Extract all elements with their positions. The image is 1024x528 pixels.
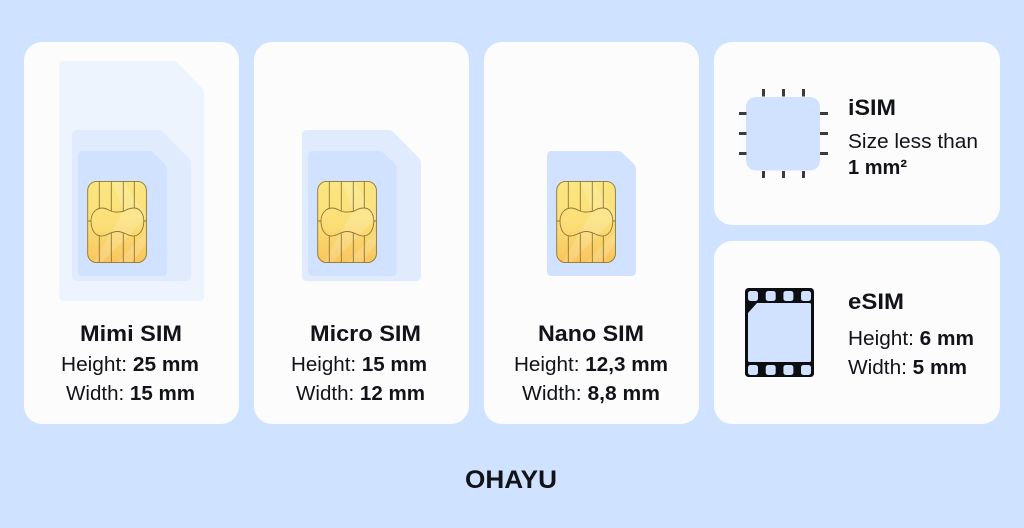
panel: Mimi SIM bbox=[24, 42, 239, 424]
heading: Nano SIM: Nano SIM bbox=[538, 321, 644, 346]
icon: gold chip bbox=[317, 181, 377, 263]
text: height: Height: 12,3 mm bbox=[514, 354, 668, 376]
icon: processor bbox=[739, 89, 828, 178]
icon: embedded chip film bbox=[745, 288, 814, 377]
icon: gold chip bbox=[556, 181, 616, 263]
heading: Micro SIM: Micro SIM bbox=[310, 321, 421, 346]
text: width: Width: 8,8 mm bbox=[522, 383, 660, 405]
text: height: Height: 25 mm bbox=[61, 354, 199, 376]
icon: Micro SIM card outline bbox=[302, 130, 421, 281]
panel: eSIM bbox=[714, 241, 1000, 424]
text: width: Width: 5 mm bbox=[848, 357, 967, 379]
text: width: Width: 12 mm bbox=[296, 383, 425, 405]
logo: OHAYU: OHAYU bbox=[465, 466, 557, 494]
icon: Nano SIM card outline bbox=[308, 151, 397, 276]
icon: Nano SIM card outline bbox=[547, 151, 636, 276]
panel: Nano SIM bbox=[484, 42, 699, 424]
heading: iSIM: iSIM bbox=[848, 95, 896, 120]
panel: iSIM bbox=[714, 42, 1000, 225]
text: height: Height: 15 mm bbox=[291, 354, 427, 376]
text: width: Width: 15 mm bbox=[66, 383, 195, 405]
text: size: Size less than bbox=[848, 131, 978, 153]
icon: Micro SIM card outline bbox=[72, 130, 191, 281]
text: size value: 1 mm² bbox=[848, 157, 907, 179]
text: height: Height: 6 mm bbox=[848, 328, 974, 350]
heading: eSIM: eSIM bbox=[848, 289, 904, 314]
heading: Mimi SIM: Mimi SIM bbox=[80, 321, 182, 346]
icon: Mimi SIM card outline bbox=[59, 61, 204, 301]
panel: Micro SIM bbox=[254, 42, 469, 424]
icon: gold chip bbox=[87, 181, 147, 263]
icon: Nano SIM card outline bbox=[78, 151, 167, 276]
